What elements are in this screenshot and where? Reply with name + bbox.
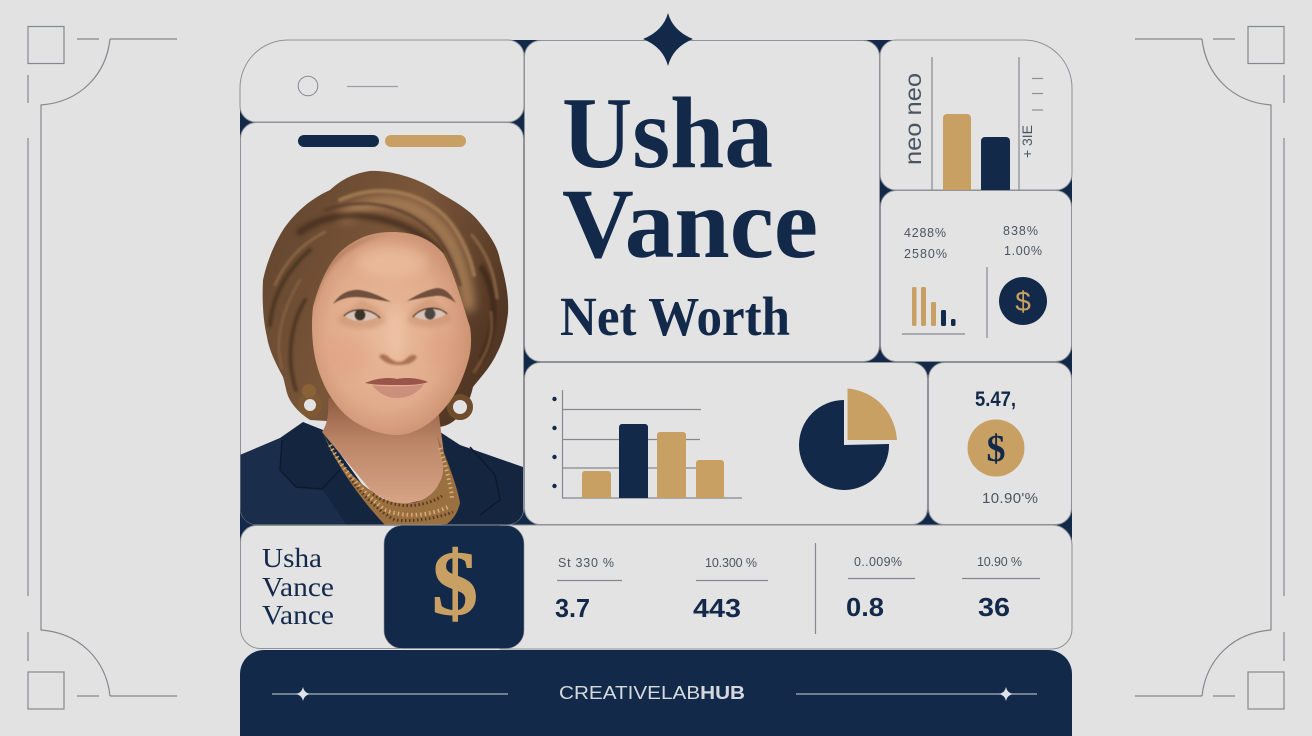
nose: [379, 354, 417, 365]
panel: name: [240, 526, 400, 648]
panel: portrait: [240, 122, 524, 530]
subheading: Net Worth: Net Worth: [560, 286, 790, 347]
panel: charts: [524, 362, 928, 524]
panel: stats row: 36: [978, 592, 1010, 622]
mini bar chart: [902, 287, 965, 334]
panel: navy dollar: $: [432, 532, 478, 634]
panel: name: Vance: [262, 600, 334, 630]
lips: [365, 378, 428, 385]
panel: percentages and coin: [880, 190, 1072, 362]
icon: gold dollar coin: $: [986, 428, 1006, 470]
bar chart: [552, 390, 742, 498]
navy bar: [981, 137, 1010, 190]
icon: dollar coin: $: [1015, 286, 1031, 317]
heading: Usha: Usha: [562, 77, 773, 190]
panel: stats row: 10.300 %: [705, 556, 757, 570]
rotated side label: + 3IE: [1019, 125, 1035, 158]
footer right rule: [796, 687, 1037, 701]
panel: navy dollar: [384, 526, 524, 648]
panel: percentages and coin: 2580%: [904, 247, 947, 261]
eyes: [344, 308, 447, 321]
footer left rule: [272, 687, 508, 701]
panel: top left: [240, 40, 524, 122]
neck: [322, 398, 446, 506]
panel: percentages and coin: 838%: [1003, 224, 1038, 238]
panel: footer: [240, 650, 1072, 736]
rotated label: neo neo: [900, 73, 926, 165]
panel: name: Usha: [262, 543, 322, 573]
panel: percentages and coin: 1.00%: [1004, 244, 1042, 258]
blazer: [240, 422, 523, 530]
panel: percentages and coin: 4288%: [904, 226, 946, 240]
right corner ornament: [1135, 26, 1284, 709]
eyebrows: [333, 290, 391, 304]
panel: stats row: 0..009%: [854, 555, 902, 569]
face shading: [314, 234, 450, 357]
icon: dollar coin: [999, 277, 1047, 325]
portrait illustration: [240, 171, 523, 530]
footer brand: CREATIVELAB HUB: [559, 682, 745, 703]
panel: coin stat: [928, 362, 1072, 524]
necklace: [322, 430, 460, 528]
hair back: [263, 171, 508, 427]
panel: title: [524, 40, 880, 362]
panel: coin stat: 10.90'%: [982, 490, 1038, 507]
panel: top right bars: [880, 40, 1072, 190]
panel: stats row: 3.7: [555, 593, 590, 623]
navy backdrop behind panels: [240, 40, 1072, 620]
navy pill: [298, 135, 379, 147]
earrings: [301, 384, 470, 417]
panel: stats row: St 330 %: [558, 556, 614, 570]
face: [312, 232, 471, 435]
icon: top star: [643, 13, 693, 66]
hair strands: [270, 191, 497, 390]
left corner ornament: [28, 26, 177, 709]
gold bar: [943, 114, 971, 190]
pie chart: [799, 388, 897, 490]
panel: stats row: [500, 525, 1072, 649]
panel: stats row: 10.90 %: [977, 555, 1022, 569]
panel: stats row: 443: [693, 593, 741, 623]
gold pill: [385, 135, 466, 147]
panel: name: Vance: [262, 572, 334, 602]
panel: coin stat: 5.47,: [975, 388, 1016, 411]
panel: stats row: 0.8: [846, 592, 884, 622]
heading: Vance: Vance: [562, 168, 818, 279]
icon: gold dollar coin: [968, 420, 1024, 476]
